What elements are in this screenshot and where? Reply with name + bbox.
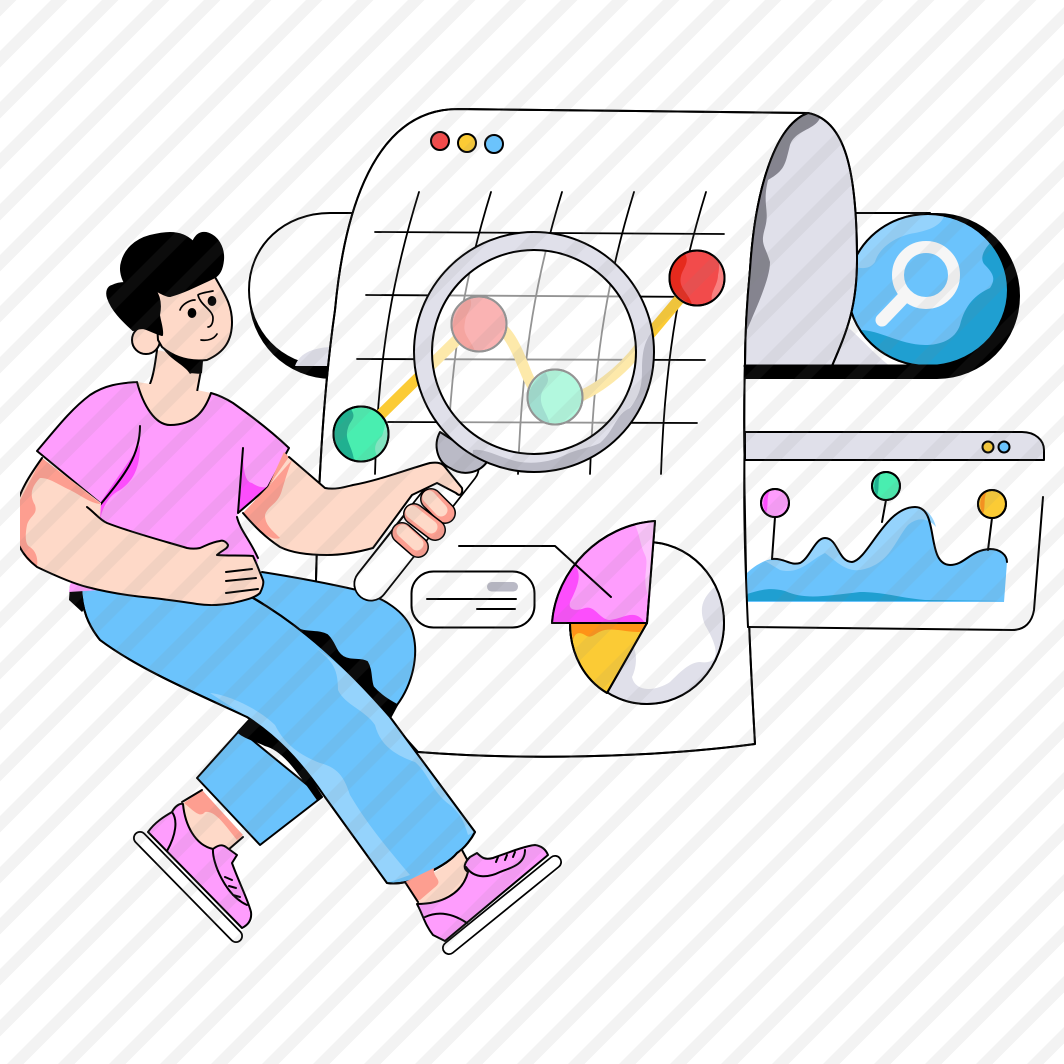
area chart <box>747 507 1007 602</box>
rear pill banner with search button <box>249 210 1020 379</box>
panel: main paper sheet <box>300 109 808 757</box>
head <box>107 233 232 360</box>
person <box>14 233 555 948</box>
shirt <box>37 382 289 592</box>
facial features <box>180 291 217 340</box>
pie slice: pink <box>552 521 655 623</box>
front ankle <box>405 850 472 905</box>
lens tint <box>432 250 636 454</box>
pin: yellow <box>978 490 1006 550</box>
paper roll <box>745 113 940 366</box>
pie slice: yellow <box>570 623 647 693</box>
face <box>155 277 232 360</box>
back shoe <box>140 804 251 936</box>
callout label box <box>412 572 534 628</box>
window header <box>745 432 1044 460</box>
front leg and thigh <box>81 572 475 883</box>
back shirt dark sliver <box>69 585 100 612</box>
callout leader line <box>459 546 611 597</box>
pin: green <box>872 472 900 522</box>
neck <box>137 347 211 425</box>
magnifying glass <box>414 232 670 480</box>
magnifier collar <box>437 432 487 473</box>
left arm resting on hip <box>14 458 263 605</box>
fingers <box>402 497 445 547</box>
magnifier handle <box>371 468 462 584</box>
data point: mint <box>528 370 582 424</box>
ear <box>132 326 160 354</box>
back ankle <box>180 790 243 852</box>
data point: rose <box>452 296 506 352</box>
icon: search button <box>852 214 1007 364</box>
back leg <box>197 719 322 845</box>
window dots <box>431 132 503 153</box>
pie chart <box>459 521 735 715</box>
pin: pink <box>761 489 789 559</box>
chart grid <box>357 192 724 474</box>
data point: green <box>334 406 388 462</box>
hair <box>107 233 223 335</box>
line chart series <box>334 250 724 462</box>
right arm holding handle <box>243 452 462 555</box>
panel: area chart window <box>745 432 1044 630</box>
front shoe <box>417 845 555 948</box>
magnifier ring <box>414 232 670 480</box>
data point: red <box>670 250 724 306</box>
magnifier handle end over the thigh <box>371 516 425 584</box>
